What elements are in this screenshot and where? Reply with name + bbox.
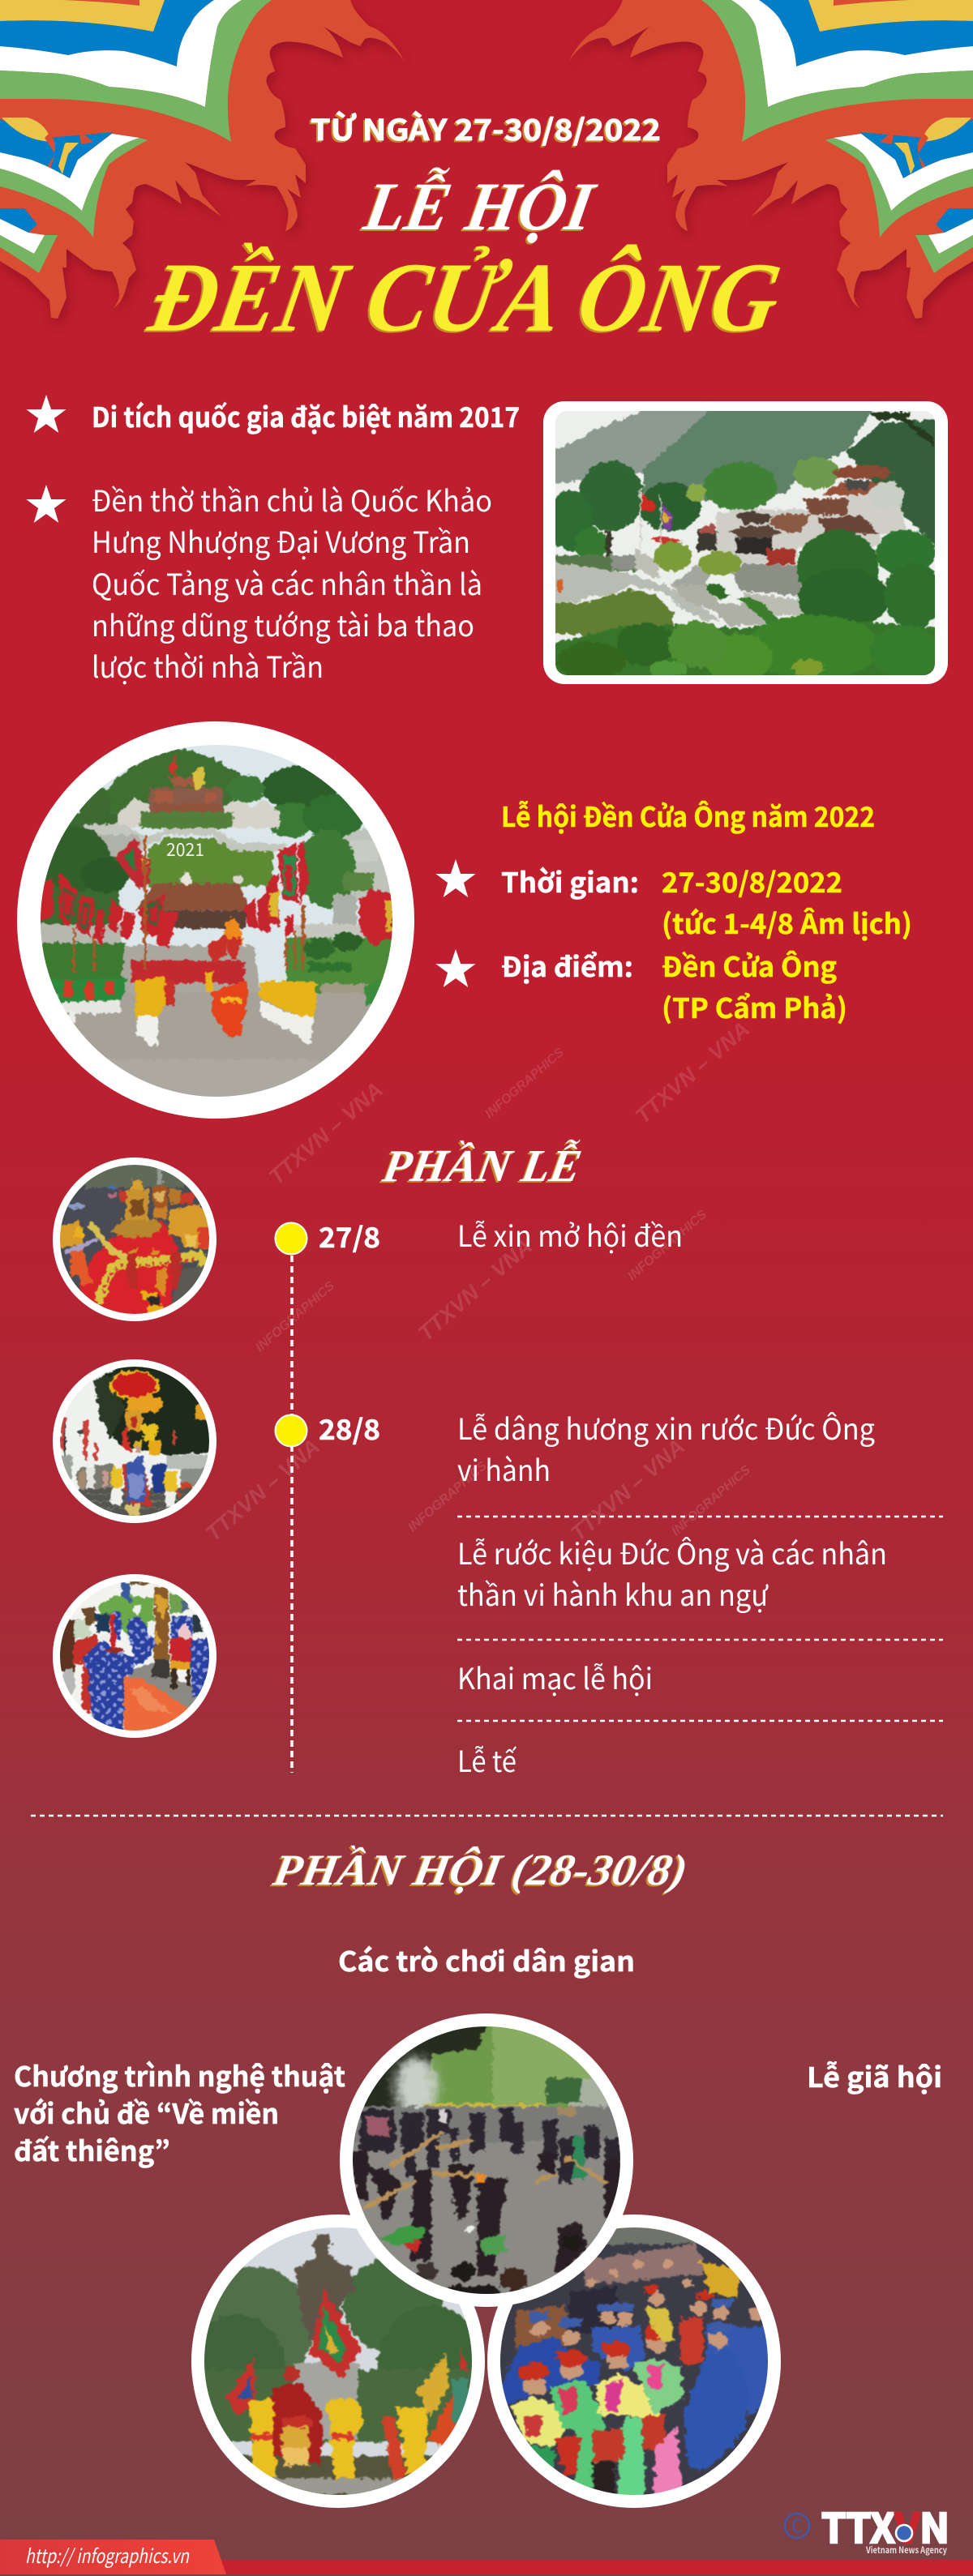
TTXVN wordmark: TTXVN xyxy=(821,2497,949,2555)
watermarks: TTXVN – VNA xyxy=(566,1434,689,1546)
watermarks: TTXVN – VNA xyxy=(264,1077,388,1189)
poles xyxy=(73,835,305,973)
dancers: yellow right xyxy=(259,981,316,1017)
event: festival opening: Khai mạc lễ hội xyxy=(457,1656,653,1698)
time label: Thời gian: xyxy=(501,861,639,901)
watermarks: TTXVN – VNA xyxy=(201,1434,324,1546)
watermarks: TTXVN – VNA xyxy=(631,1016,754,1128)
dot 27/8 xyxy=(276,1222,306,1255)
photo: temple on hillside xyxy=(543,401,948,684)
timeline spine xyxy=(290,1256,294,1773)
photo: statue and performers circle xyxy=(186,2214,493,2510)
star bullet: place xyxy=(435,949,476,987)
right flags xyxy=(243,843,310,938)
copyright mark: C xyxy=(791,2512,803,2538)
temple description paragraph: lược thời nhà Trần xyxy=(92,644,324,687)
event: incense offering: Lễ dâng hương xin rước Đức Ông xyxy=(457,1406,875,1448)
temple description paragraph: Hưng Nhượng Đại Vương Trần xyxy=(92,520,470,562)
watermarks: INFOGRAPHICS xyxy=(669,1463,753,1538)
label: folk games: Các trò chơi dân gian xyxy=(338,1940,635,1979)
left wing xyxy=(0,0,405,319)
date line: TỪ NGÀY 27-30/8/2022 xyxy=(311,107,661,149)
temple description paragraph: những dũng tướng tài ba thao xyxy=(92,603,474,645)
photo: costumed procession circle xyxy=(485,2214,787,2510)
pavement xyxy=(57,991,371,1062)
event: palanquin procession: Lễ rước kiệu Đức Ông và các nhân xyxy=(457,1531,887,1573)
photo: parade with umbrella circle xyxy=(51,1358,216,1523)
heritage statement: Di tích quốc gia đặc biệt năm 2017 xyxy=(92,396,520,435)
label: closing ceremony: Lễ giã hội xyxy=(807,2056,942,2095)
star bullet 1 xyxy=(26,395,66,433)
temple description paragraph xyxy=(92,478,492,687)
label: art programme: với chủ đề “Về miền xyxy=(14,2092,279,2132)
date 27/8: 27/8 xyxy=(319,1216,380,1256)
right wing xyxy=(568,0,973,319)
watermarks: INFOGRAPHICS xyxy=(253,1279,337,1354)
dot 28/8 xyxy=(276,1415,306,1446)
timeline xyxy=(276,1213,943,1781)
photo: blue-robed officials circle xyxy=(51,1573,216,1739)
festival info block xyxy=(435,795,912,1026)
star bullet 2 xyxy=(26,485,66,523)
event: incense offering: vi hành xyxy=(457,1448,551,1490)
place value: Đền Cửa Ông xyxy=(662,945,837,985)
event: incense offering xyxy=(457,1406,875,1490)
temple description paragraph: Quốc Tảng và các nhân thần là xyxy=(92,562,482,604)
dancers: green group xyxy=(61,997,120,1013)
watermarks: INFOGRAPHICS xyxy=(625,1208,709,1283)
foreground trees xyxy=(796,528,880,587)
flags xyxy=(640,489,641,549)
event: palanquin procession xyxy=(457,1531,887,1615)
year label: 2021 xyxy=(166,836,204,862)
footer band xyxy=(0,2540,973,2574)
place label: Địa điểm: xyxy=(501,945,633,985)
star bullet: time xyxy=(435,859,476,897)
agency name: Vietnam News Agency xyxy=(865,2544,948,2557)
url tab xyxy=(0,2540,226,2574)
photo: dragon and palanquin circle xyxy=(51,1157,216,1323)
label: art programme: Chương trình nghệ thuật xyxy=(14,2055,345,2095)
logo globe xyxy=(896,2525,912,2541)
date 28/8: 28/8 xyxy=(319,1408,380,1448)
watermarks: INFOGRAPHICS xyxy=(482,1046,567,1121)
url: http:// infographics.vn xyxy=(25,2540,190,2569)
temple description paragraph: Đền thờ thần chủ là Quốc Khảo xyxy=(92,478,492,520)
header decoration: flags and dragon wings xyxy=(0,0,973,319)
heading: festivities part: PHẦN HỘI (28-30/8) xyxy=(269,1845,692,1894)
title block xyxy=(141,107,788,353)
info heading: Lễ hội Đền Cửa Ông năm 2022 xyxy=(501,795,875,835)
copyright mark xyxy=(785,2512,809,2538)
time value: 27-30/8/2022 xyxy=(662,861,842,901)
title line 2: ĐỀN CỬA ÔNG xyxy=(141,242,788,353)
temple xyxy=(716,480,911,563)
photo: festival procession circle xyxy=(17,721,414,1119)
watermarks: INFOGRAPHICS xyxy=(405,1459,490,1534)
dragon xyxy=(223,917,242,946)
city: (TP Cẩm Phả) xyxy=(662,986,847,1026)
footer logo xyxy=(785,2497,949,2557)
label: art programme: đất thiêng” xyxy=(14,2129,170,2169)
event: opening request: Lễ xin mở hội đền xyxy=(457,1213,683,1256)
left flags xyxy=(38,873,165,946)
event: sacrifice ritual: Lễ tế xyxy=(457,1739,517,1781)
watermarks xyxy=(201,1016,754,1546)
lunar date: (tức 1-4/8 Âm lịch) xyxy=(662,902,912,942)
dragon dancers xyxy=(212,981,249,1038)
heading: ceremony part: PHẦN LỄ xyxy=(379,1139,585,1192)
dancers: yellow left xyxy=(135,977,173,1019)
label: art programme xyxy=(14,2055,345,2169)
walls and stairs xyxy=(549,562,719,620)
photo: folk games circle xyxy=(332,2013,645,2312)
event: palanquin procession: thần vi hành khu an ngự xyxy=(457,1573,769,1615)
title line 1: LỄ HỘI xyxy=(358,168,602,245)
watermarks: TTXVN – VNA xyxy=(414,1234,537,1346)
